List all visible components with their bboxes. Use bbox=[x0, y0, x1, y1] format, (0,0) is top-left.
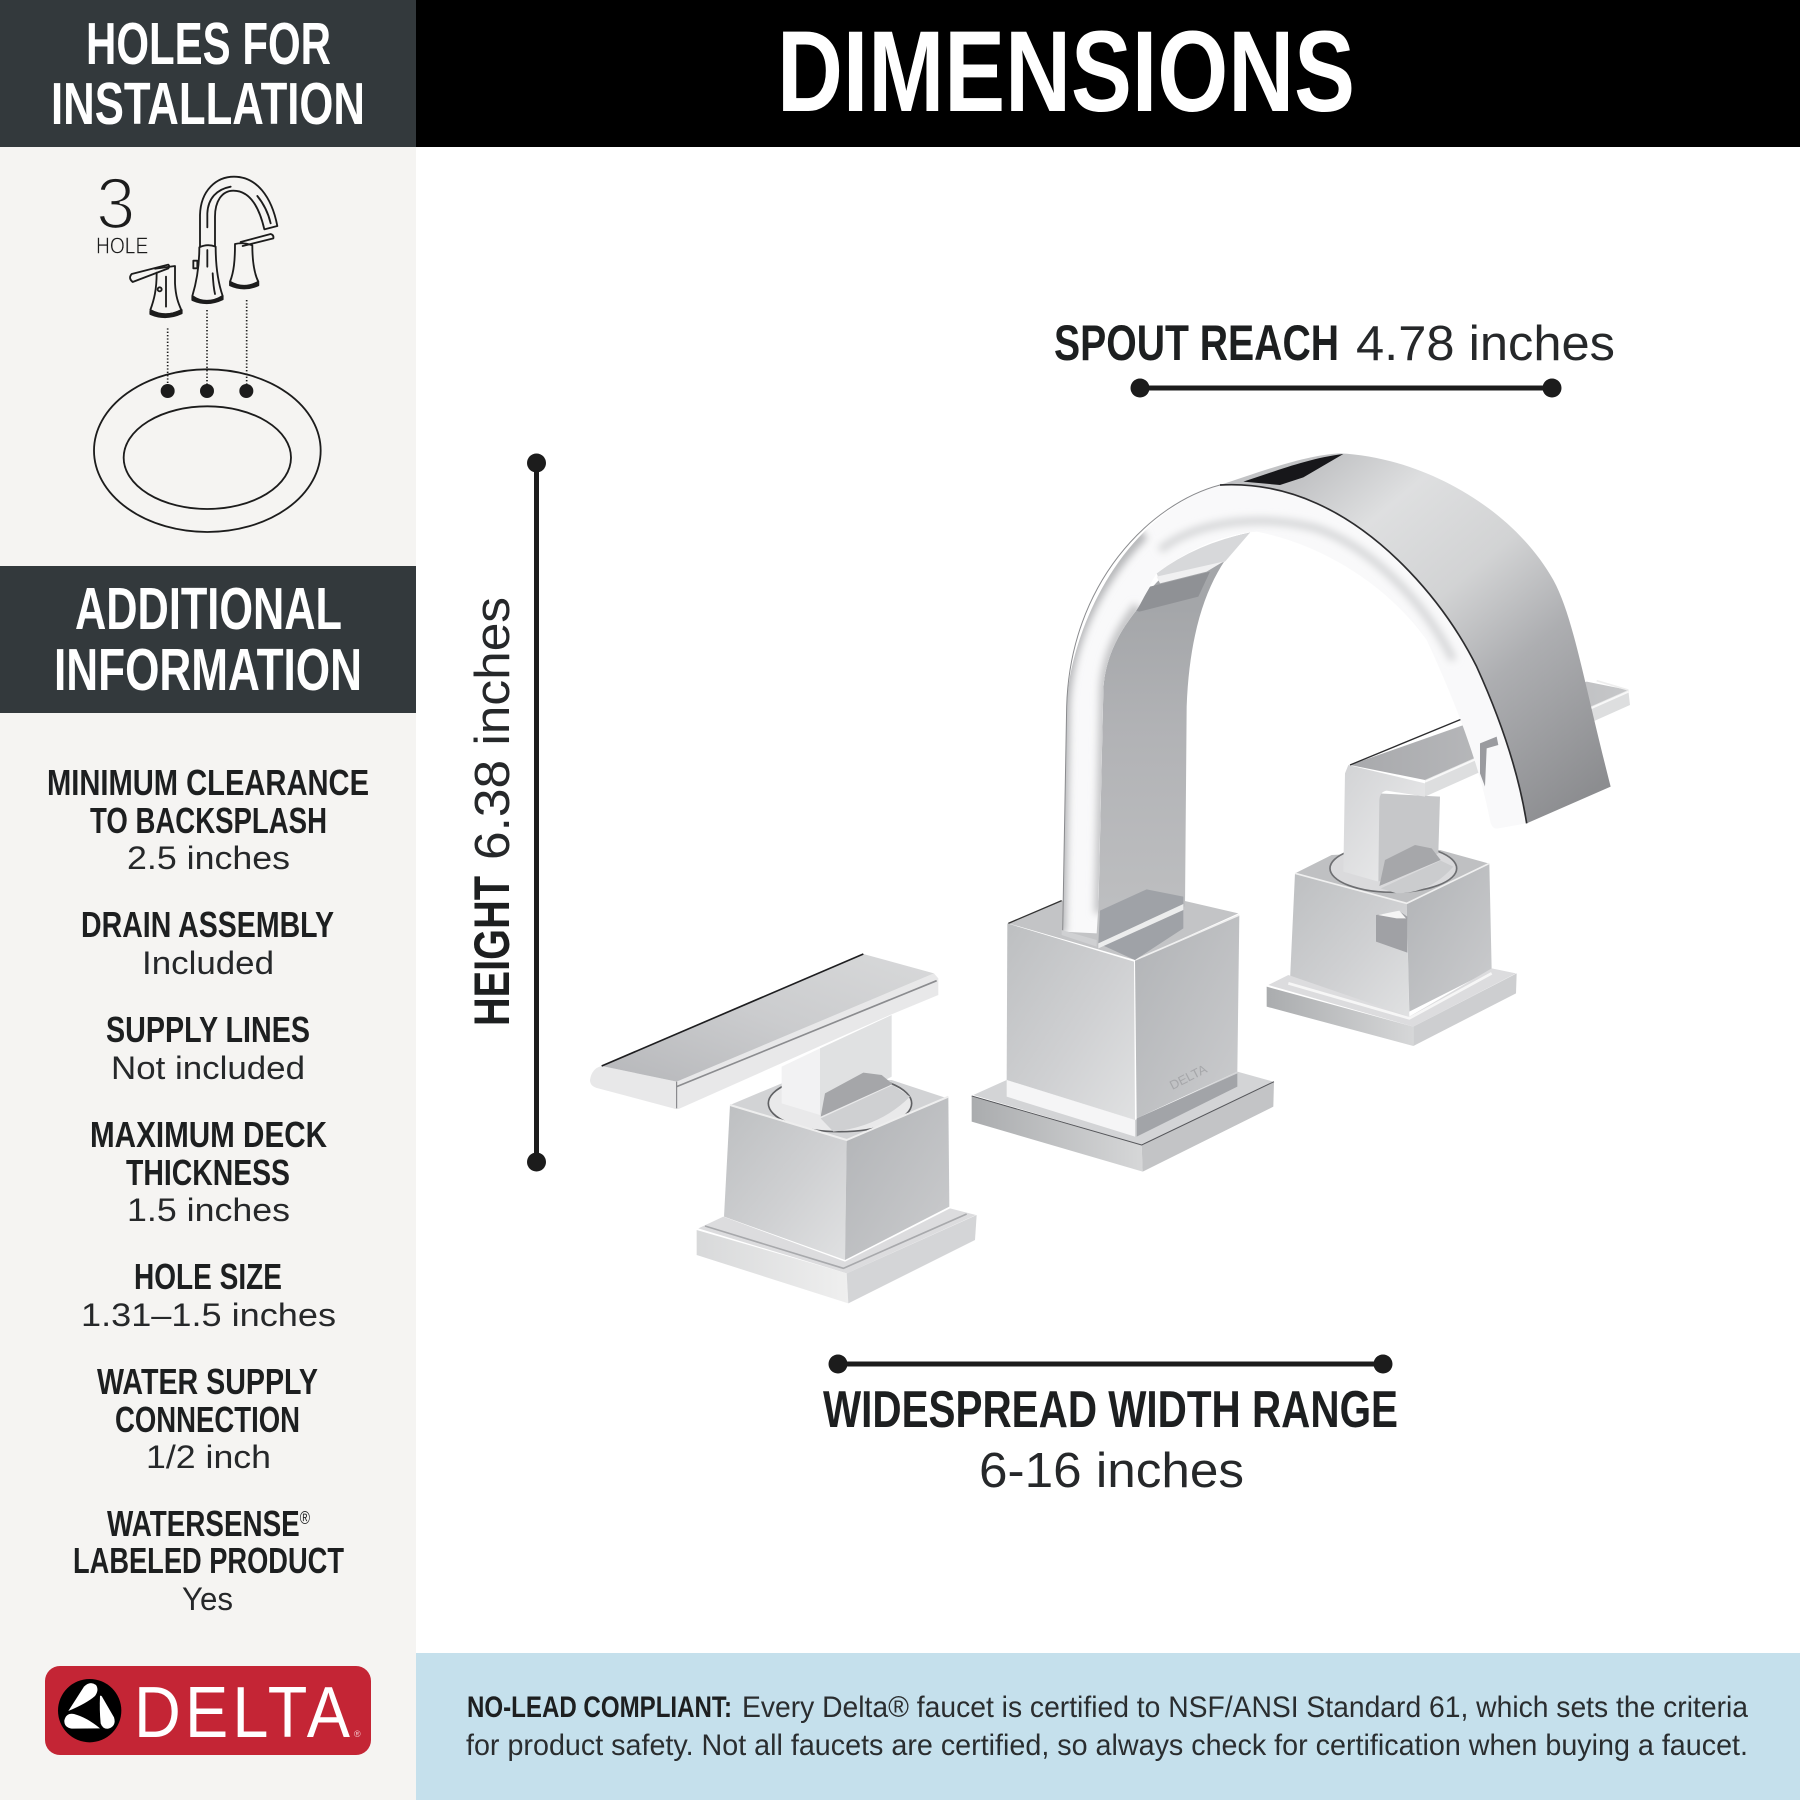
title bar: dimensions bbox=[416, 0, 1800, 147]
spec: minimum clearance: MINIMUM CLEARANCE bbox=[47, 762, 369, 803]
spout bright front band bbox=[1063, 485, 1527, 933]
spec: hole size bbox=[81, 1256, 336, 1333]
faucet photo bbox=[590, 453, 1630, 1303]
spec: watersense labeled product: WATERSENSE bbox=[107, 1503, 356, 1544]
arrow: widespread width dimension line bbox=[828, 1354, 1392, 1374]
label: spout reach bbox=[1054, 315, 1615, 371]
label: height: 6.38 inches bbox=[466, 597, 520, 860]
header: holes for installation: HOLES FOR bbox=[86, 11, 331, 77]
spec: minimum clearance: 2.5 inches bbox=[127, 840, 290, 876]
spec: water supply connection: 1/2 inch bbox=[146, 1439, 271, 1475]
footer: no-lead compliant note bbox=[416, 1653, 1800, 1800]
right handle neck bbox=[1343, 765, 1440, 882]
spec: maximum deck thickness: MAXIMUM DECK bbox=[90, 1114, 327, 1155]
right handle lever bbox=[1350, 681, 1630, 797]
footer: no-lead compliant note: NO-LEAD COMPLIANT: bbox=[467, 1691, 732, 1724]
holes bbox=[161, 384, 253, 398]
spout foot bbox=[1062, 889, 1183, 960]
spec: supply lines: SUPPLY LINES bbox=[106, 1009, 310, 1050]
spec: water supply connection bbox=[97, 1361, 318, 1475]
spec: drain assembly: Included bbox=[142, 945, 274, 981]
label: widespread width range: WIDESPREAD WIDTH RANGE bbox=[823, 1381, 1398, 1439]
small faucet spout and body bbox=[130, 177, 277, 317]
spec list bbox=[47, 762, 369, 1617]
spec: watersense labeled product: ® bbox=[300, 1508, 310, 1528]
spec: water supply connection: WATER SUPPLY bbox=[97, 1361, 318, 1402]
logo wordmark: DELTA bbox=[134, 1672, 350, 1753]
spec: minimum clearance bbox=[47, 762, 369, 876]
center base bbox=[973, 1072, 1273, 1145]
logo: delta bbox=[45, 1666, 371, 1755]
sink basin bbox=[94, 369, 321, 532]
spec: watersense labeled product: LABELED PRODUCT bbox=[73, 1540, 344, 1581]
title bar: dimensions: DIMENSIONS bbox=[777, 8, 1355, 136]
spec: watersense labeled product bbox=[73, 1503, 344, 1617]
arrow: height dimension line bbox=[527, 454, 546, 1172]
spec: maximum deck thickness: THICKNESS bbox=[126, 1152, 290, 1193]
label: widespread width range bbox=[823, 1381, 1398, 1498]
label: spout reach: SPOUT REACH bbox=[1054, 315, 1339, 371]
right handle base bbox=[1268, 968, 1516, 1027]
left handle knob bbox=[821, 1073, 910, 1132]
left handle cube bbox=[730, 1080, 947, 1140]
sidebar background bbox=[0, 0, 416, 1800]
hole label: HOLE bbox=[96, 232, 148, 258]
spec: supply lines: Not included bbox=[111, 1050, 305, 1086]
spout reflection bbox=[1136, 533, 1250, 612]
logo: delta: ® bbox=[354, 1729, 361, 1739]
left handle neck bbox=[782, 1048, 820, 1115]
spec: supply lines bbox=[106, 1009, 310, 1086]
center block bbox=[1008, 901, 1238, 960]
spec: maximum deck thickness bbox=[90, 1114, 327, 1228]
left handle bbox=[590, 954, 977, 1303]
center body and base bbox=[972, 901, 1274, 1172]
number three: 3 bbox=[96, 163, 135, 244]
spout bbox=[1060, 453, 1611, 933]
left handle base bbox=[698, 1208, 976, 1273]
spec: hole size: 1.31–1.5 inches bbox=[81, 1297, 336, 1333]
header: additional information: ADDITIONAL bbox=[75, 576, 342, 642]
right handle cube bbox=[1295, 850, 1488, 903]
delta engraving: DELTA bbox=[1167, 1062, 1210, 1093]
small left handle bbox=[150, 266, 181, 314]
spout band shading bbox=[1060, 521, 1453, 933]
right handle knob bbox=[1379, 845, 1453, 893]
spout top band bbox=[1220, 453, 1611, 823]
spec: drain assembly bbox=[81, 904, 334, 981]
dotted guide lines bbox=[168, 300, 247, 385]
spec: watersense labeled product: Yes bbox=[182, 1581, 233, 1617]
spec: water supply connection: CONNECTION bbox=[115, 1399, 300, 1440]
spec: drain assembly: DRAIN ASSEMBLY bbox=[81, 904, 334, 945]
label: widespread width range: 6-16 inches bbox=[979, 1444, 1244, 1498]
spec: minimum clearance: TO BACKSPLASH bbox=[90, 800, 327, 841]
icon: three hole sink installation diagram bbox=[94, 163, 321, 532]
spec: maximum deck thickness: 1.5 inches bbox=[127, 1192, 290, 1228]
label: height bbox=[464, 597, 520, 1026]
logo mark bbox=[58, 1679, 121, 1742]
footer: no-lead compliant note: Every Delta® faucet is certified to NSF/ANSI Standard 61, which sets the criteria bbox=[742, 1691, 1748, 1724]
spec: hole size: HOLE SIZE bbox=[134, 1256, 282, 1297]
footer: no-lead compliant note: for product safety. Not all faucets are certified, so always check for certification when buying a faucet. bbox=[466, 1729, 1748, 1762]
small right handle bbox=[230, 243, 258, 286]
header: additional information: INFORMATION bbox=[54, 637, 362, 703]
label: height: HEIGHT bbox=[464, 876, 520, 1026]
header: holes for installation bbox=[0, 0, 416, 147]
header: additional information bbox=[0, 566, 416, 713]
header: holes for installation: INSTALLATION bbox=[51, 71, 365, 137]
right handle bbox=[1267, 681, 1630, 1046]
label: spout reach: 4.78 inches bbox=[1356, 317, 1615, 371]
arrow: spout reach dimension line bbox=[1130, 378, 1562, 398]
spout inner stem bbox=[1098, 533, 1250, 913]
left handle lever bbox=[590, 954, 938, 1109]
